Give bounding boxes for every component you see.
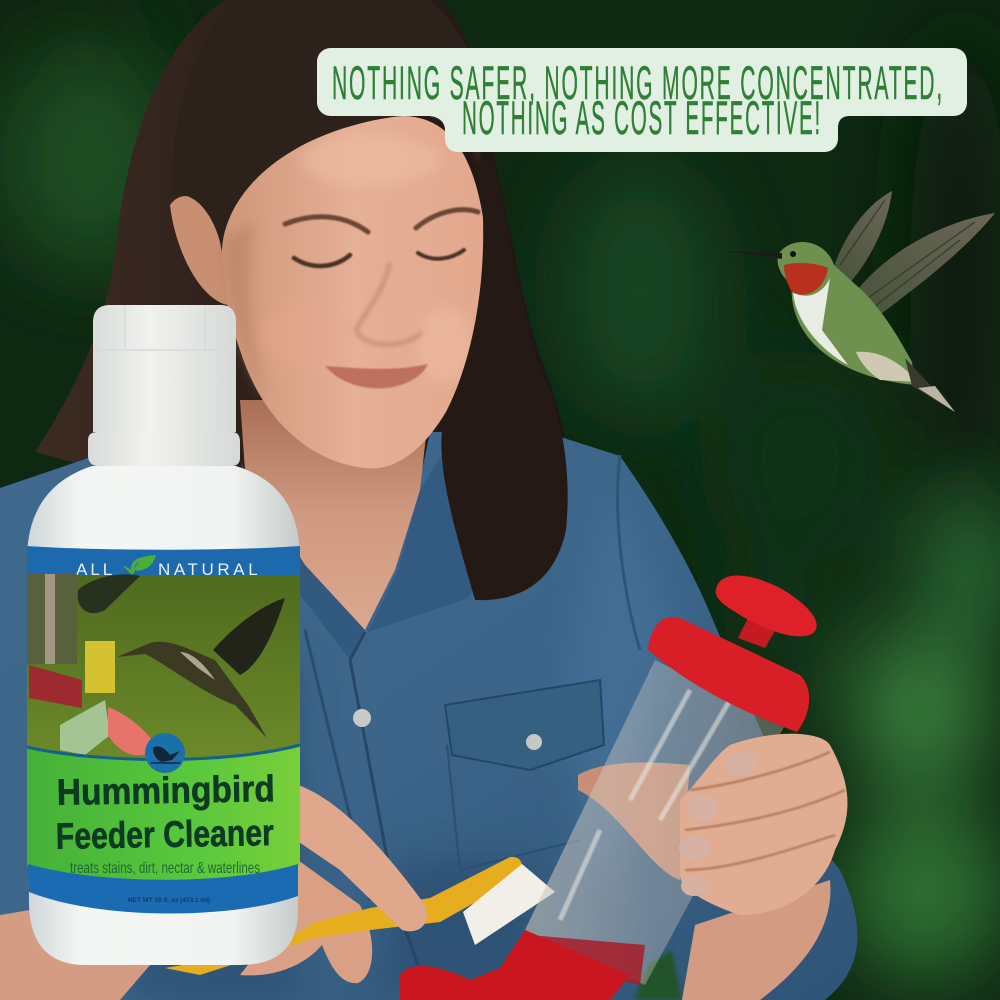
bottle label: all natural: ALL	[76, 560, 115, 579]
bottle label: product name: Feeder Cleaner	[55, 812, 274, 857]
woman: eyes, brows, nose, mouth	[285, 210, 478, 388]
woman: left hand fingers behind brush	[240, 860, 372, 983]
hummingbird: beak	[724, 251, 782, 259]
woman: neck	[240, 400, 430, 630]
green gap below the feeder	[634, 950, 682, 1000]
woman: denim shirt	[0, 432, 858, 1000]
woman: shirt placket and pockets	[305, 455, 640, 1000]
woman: forearm	[0, 910, 150, 1000]
headline bubble	[317, 48, 967, 152]
right hand fingers	[679, 734, 848, 915]
brush: yellow handle and white bristles	[165, 857, 555, 975]
hummingbird: front wing	[850, 213, 995, 322]
hummingbird: back wing	[830, 191, 892, 285]
woman: collar	[240, 450, 495, 660]
hummingbird: red throat	[784, 263, 828, 295]
bottle	[27, 305, 300, 965]
feeder: tube reflections	[525, 690, 730, 985]
right wrist	[682, 880, 830, 1000]
right hand behind feeder	[578, 762, 690, 880]
bottle label: bird picture	[117, 598, 285, 738]
hummingbird: feather lines	[840, 200, 975, 310]
woman: front hair	[172, 0, 568, 600]
woman: shirt shading folds	[130, 480, 680, 1000]
bottle label: bird badge	[145, 733, 185, 773]
feeder: red top cap with knob	[648, 575, 817, 732]
bottle label: product name: treats stains, dirt, nectar & waterlines	[70, 860, 260, 877]
feeder: red base	[400, 930, 630, 1000]
bottle: body	[27, 466, 300, 965]
bottle: neck	[88, 432, 240, 466]
bottle label: photo panel	[27, 574, 300, 761]
bottle label: product name: Hummingbird	[56, 768, 275, 813]
feeder: clear tube	[525, 660, 785, 985]
bottle label: all natural: NATURAL	[158, 560, 261, 579]
hummingbird	[724, 191, 995, 412]
bottle label: product name	[55, 768, 275, 877]
hummingbird: body	[778, 242, 915, 385]
bottle label: green panel	[27, 746, 300, 880]
bottle: cap	[93, 305, 236, 432]
woman: back hair	[35, 0, 569, 601]
woman: face	[170, 116, 488, 468]
bottle label: net weight: NET WT 16 fl. oz (473.1 ml)	[128, 897, 210, 904]
bottle label: blue band bottom	[28, 864, 298, 914]
bottle label: blue band top	[27, 546, 300, 578]
bottle label: all natural	[76, 556, 261, 579]
hummingbird: tail	[856, 352, 918, 382]
hummingbird: white chest	[793, 278, 848, 365]
woman: index finger	[296, 785, 427, 931]
